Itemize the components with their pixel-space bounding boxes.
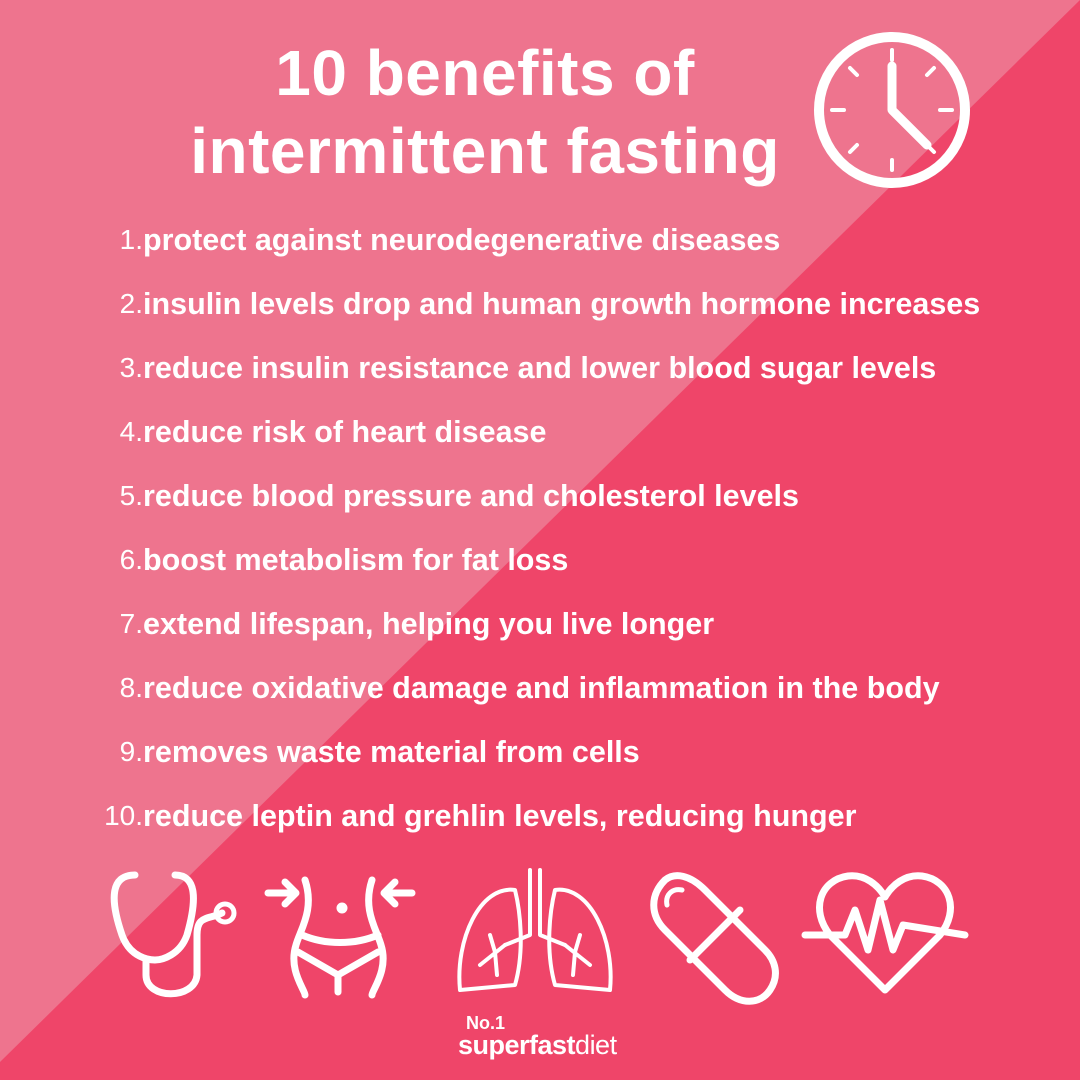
title: intermittent fasting [190, 115, 780, 187]
benefits list: reduce insulin resistance and lower blood sugar levels [143, 351, 936, 385]
benefits list: boost metabolism for fat loss [143, 543, 568, 577]
title: 10 benefits of [275, 37, 695, 109]
benefits list: reduce leptin and grehlin levels, reducing hunger [143, 799, 857, 833]
logo: No.1 [466, 1013, 505, 1033]
logo [458, 1013, 617, 1060]
benefits list: reduce blood pressure and cholesterol levels [143, 479, 799, 513]
benefits list: protect against neurodegenerative diseases [143, 223, 780, 257]
benefits list: removes waste material from cells [143, 735, 640, 769]
title [190, 37, 780, 187]
benefits list: 2. [120, 288, 143, 319]
benefits list: 8. [120, 672, 143, 703]
icon: clock [814, 32, 970, 188]
benefits list: 10. [104, 800, 143, 831]
benefits list: 4. [120, 416, 143, 447]
logo: superfastdiet [458, 1030, 617, 1060]
benefits list: 3. [120, 352, 143, 383]
benefits list: 1. [120, 224, 143, 255]
benefits list: 9. [120, 736, 143, 767]
icon: stethoscope [114, 875, 234, 994]
benefits list: 6. [120, 544, 143, 575]
icon: pill [654, 876, 775, 1001]
benefits list: 5. [120, 480, 143, 511]
icon: lungs [459, 870, 611, 990]
icon: heart [805, 876, 965, 990]
icon: waist [268, 880, 412, 995]
benefits list [104, 223, 980, 833]
benefits list: reduce risk of heart disease [143, 415, 546, 449]
benefits list: insulin levels drop and human growth hormone increases [143, 287, 980, 321]
benefits list: reduce oxidative damage and inflammation in the body [143, 671, 940, 705]
benefits list: extend lifespan, helping you live longer [143, 607, 714, 641]
icons row [110, 868, 968, 1005]
benefits list: 7. [120, 608, 143, 639]
